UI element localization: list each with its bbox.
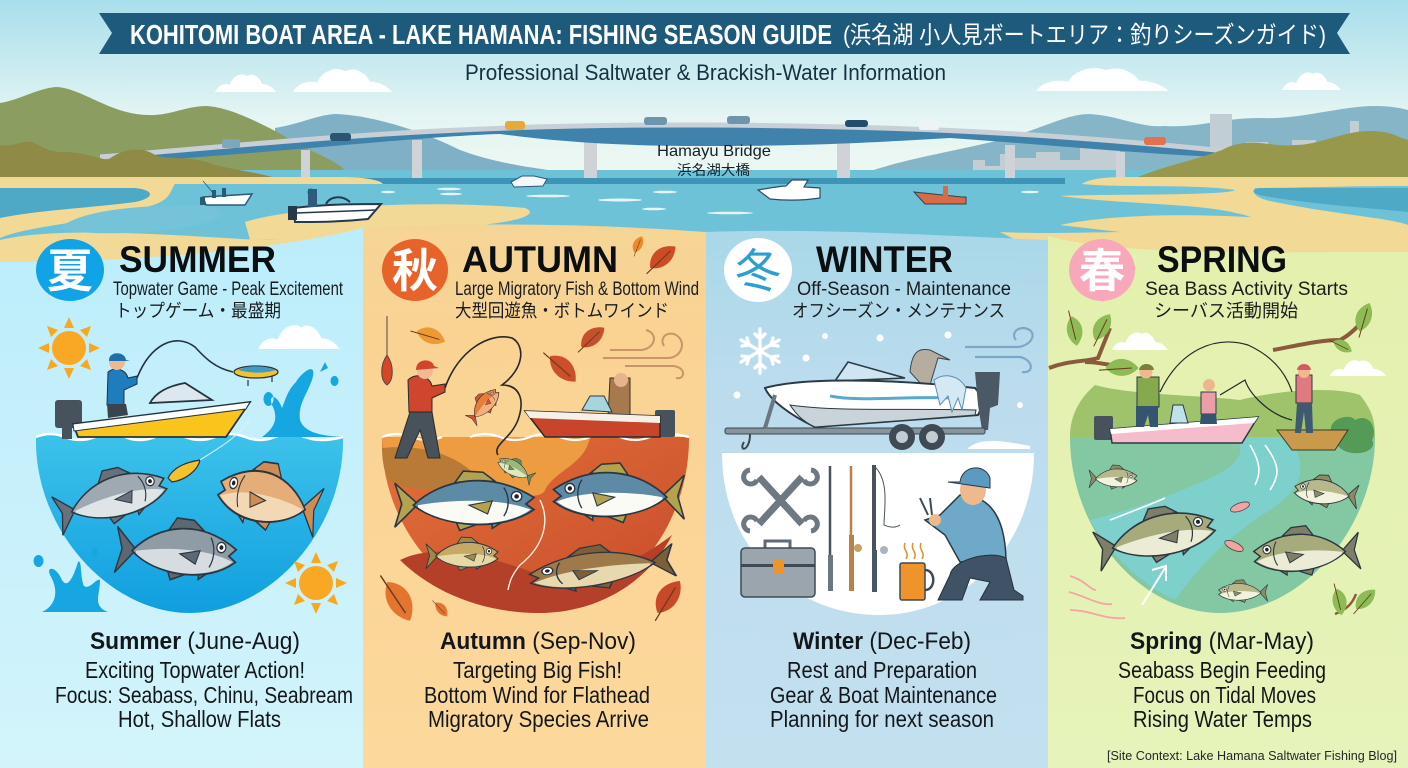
panel: summer	[0, 228, 363, 768]
bridge pillars	[301, 136, 1125, 178]
fish: small left	[1089, 465, 1137, 489]
summer body copy	[55, 628, 353, 732]
autumn angler	[395, 360, 445, 458]
olive foreground hills	[0, 131, 1408, 177]
water	[0, 170, 1408, 260]
icon: toolbox	[741, 541, 815, 597]
icon: fishing rods	[828, 465, 900, 592]
clouds	[1112, 332, 1386, 376]
fish: yellowtail right	[554, 463, 684, 522]
winter subtitle	[792, 279, 1011, 321]
winter badge	[724, 238, 792, 302]
autumn water basin	[382, 437, 689, 613]
spring hills	[1070, 385, 1375, 437]
surface lure	[234, 366, 278, 386]
winter subtitle: オフシーズン・メンテナンス	[792, 301, 1005, 321]
icon: crossed wrenches	[744, 470, 817, 531]
spring subtitle	[1145, 279, 1348, 321]
pink lures	[1223, 500, 1251, 554]
winter body copy: Rest and Preparation	[787, 657, 977, 683]
panel: autumn	[363, 225, 706, 768]
title banner	[99, 13, 1350, 54]
fish: small baitfish	[426, 537, 498, 570]
spring body copy	[1118, 628, 1326, 732]
tidal flow arrow	[1142, 566, 1166, 605]
bridge deck	[100, 127, 1245, 160]
winter body copy	[770, 628, 997, 732]
hooked fish	[462, 383, 504, 427]
summer subtitle: トップゲーム・最盛期	[115, 301, 281, 321]
spring angler right	[1295, 364, 1313, 433]
winter subtitle: Off-Season - Maintenance	[797, 279, 1011, 300]
spring sprig	[1330, 582, 1380, 617]
subtitle: Professional Saltwater & Brackish-Water Information	[465, 60, 946, 85]
spring subtitle: シーバス活動開始	[1154, 301, 1298, 321]
tidal channel	[1090, 437, 1300, 600]
autumn body copy: Autumn (Sep-Nov)	[440, 628, 636, 655]
white workbench basin	[722, 453, 1034, 615]
bridge label	[657, 143, 771, 178]
summer body copy: Summer (June-Aug)	[90, 628, 300, 655]
bridge label: Hamayu Bridge	[657, 143, 771, 160]
panel: spring	[1048, 236, 1408, 768]
spring angler centre	[1200, 379, 1217, 424]
water ripples	[381, 188, 1039, 214]
lagoons	[0, 188, 1408, 218]
spring body copy: Seabass Begin Feeding	[1118, 657, 1326, 683]
title banner: (浜名湖 小人見ボートエリア：釣りシーズンガイド)	[843, 22, 1326, 49]
fish: small lower	[1218, 580, 1268, 602]
clouds	[215, 68, 1341, 92]
icon: wind	[965, 328, 1033, 372]
autumn body copy: Targeting Big Fish!	[453, 657, 622, 683]
spring badge: 春	[1079, 245, 1125, 297]
autumn body copy: Bottom Wind for Flathead	[424, 682, 650, 708]
autumn boat and driver	[525, 373, 675, 437]
summer angler	[107, 353, 137, 418]
fishing rod and line	[137, 341, 233, 378]
autumn subtitle: 大型回遊魚・ボトムワインド	[455, 301, 669, 321]
summer subtitle: Topwater Game - Peak Excitement	[113, 279, 344, 300]
icon: hanging lure	[382, 316, 392, 385]
mountains	[0, 87, 1408, 180]
bridge cars	[222, 116, 1166, 148]
footer source note: [Site Context: Lake Hamana Saltwater Fishing Blog]	[1107, 748, 1397, 763]
autumn body copy	[424, 628, 650, 732]
icon: water splash bottom	[34, 548, 108, 612]
panel: winter	[706, 231, 1048, 768]
spring subtitle: Sea Bass Activity Starts	[1145, 279, 1348, 300]
spring body copy: Spring (Mar-May)	[1130, 628, 1314, 655]
background scene: lake and bridge	[0, 0, 1408, 262]
summer body copy: Exciting Topwater Action!	[85, 657, 305, 683]
spring body copy: Focus on Tidal Moves	[1133, 682, 1316, 708]
mechanic figure	[920, 468, 1023, 600]
spring body copy: Rising Water Temps	[1133, 706, 1312, 732]
snow dots	[734, 332, 1023, 408]
flow lines	[1110, 445, 1277, 520]
sand shores	[0, 177, 1408, 262]
fish: sea bass right	[1252, 522, 1361, 579]
boat on trailer	[725, 349, 1030, 450]
summer water basin	[36, 434, 343, 613]
fish: seabream	[213, 452, 327, 541]
summer body copy: Hot, Shallow Flats	[118, 706, 281, 732]
fishing rods and lines	[1160, 342, 1292, 420]
icon: water splash	[262, 362, 343, 437]
city skyline	[973, 114, 1359, 170]
winter badge: 冬	[735, 245, 781, 297]
winter body copy: Gear & Boat Maintenance	[770, 682, 997, 708]
icon: coffee mug	[900, 543, 933, 600]
fish: yellowtail left	[395, 471, 534, 530]
spring branches	[1049, 300, 1376, 376]
autumn subtitle: Large Migratory Fish & Bottom Wind	[455, 279, 699, 300]
icon: small snowflake	[1001, 465, 1023, 491]
autumn subtitle	[455, 279, 699, 321]
spring water basin	[1070, 437, 1375, 613]
summer body copy: Focus: Seabass, Chinu, Seabream	[55, 682, 353, 708]
autumn body copy: Migratory Species Arrive	[428, 706, 649, 732]
icon: snowflake	[741, 329, 779, 373]
winter body copy: Winter (Dec-Feb)	[793, 628, 971, 655]
autumn leaves	[374, 234, 688, 626]
icon: sun	[38, 317, 100, 379]
winter body copy: Planning for next season	[770, 706, 994, 732]
autumn shallows and bank	[382, 434, 689, 613]
icon: cloud	[258, 325, 340, 349]
spring badge	[1069, 239, 1135, 301]
summer badge: 夏	[47, 245, 93, 297]
autumn badge	[382, 239, 448, 301]
soft lure and line	[508, 500, 545, 590]
bush and small boat	[1277, 417, 1374, 453]
spring angler left	[1136, 364, 1159, 427]
small boats	[200, 176, 966, 222]
bridge label: 浜名湖大橋	[677, 162, 750, 178]
summer badge	[36, 239, 104, 301]
autumn rod and line	[445, 337, 521, 455]
spring heading: SPRING	[1157, 239, 1287, 280]
fish: large sea bass	[1091, 496, 1219, 574]
summer boat	[55, 383, 250, 439]
title banner: KOHITOMI BOAT AREA - LAKE HAMANA: FISHING SEASON GUIDE	[130, 19, 832, 50]
winter heading: WINTER	[816, 239, 953, 280]
summer subtitle	[113, 279, 344, 321]
icon: wind	[603, 330, 683, 378]
pink wind lines	[1069, 576, 1125, 618]
underwater lure	[168, 420, 250, 482]
fish: small right	[1293, 472, 1360, 511]
small green fish	[495, 451, 538, 486]
summer heading: SUMMER	[119, 239, 276, 280]
fish: black seabream	[114, 514, 238, 584]
spring boat	[1094, 405, 1258, 443]
fish: flathead	[527, 535, 677, 599]
autumn badge: 秋	[392, 245, 438, 297]
fish: sea bass	[49, 455, 172, 538]
autumn heading: AUTUMN	[462, 239, 618, 280]
icon: sun lower	[285, 552, 347, 614]
